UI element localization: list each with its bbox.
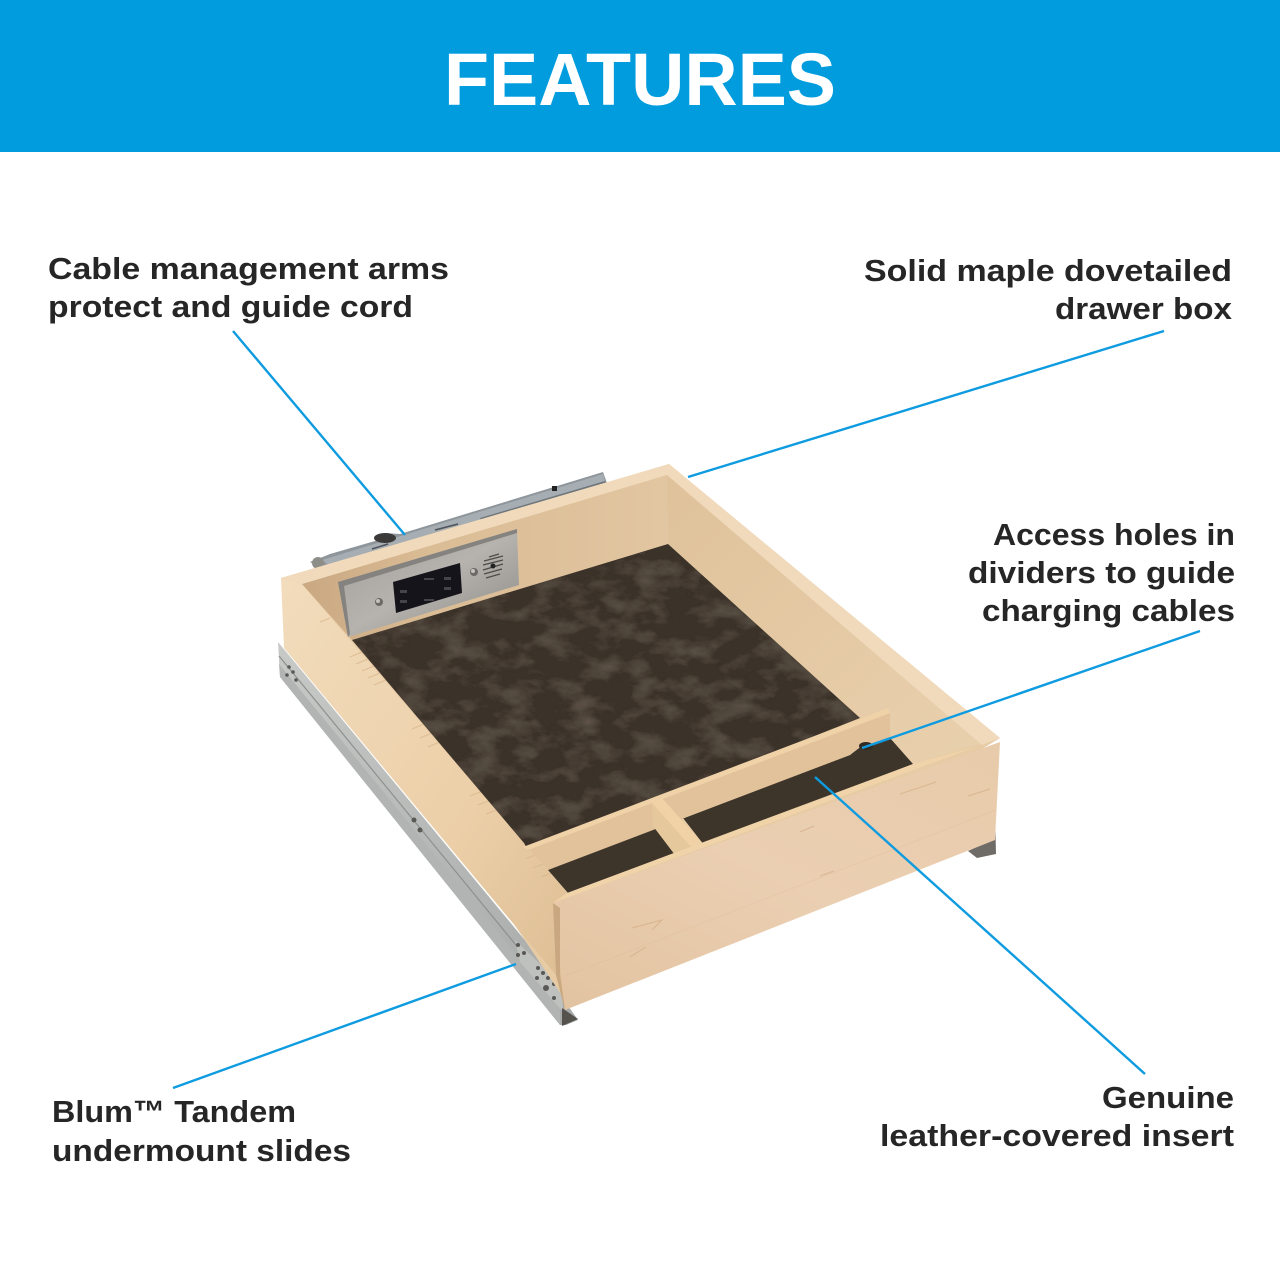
back and right rim xyxy=(281,464,1000,745)
drawer left outer side xyxy=(281,578,567,1010)
label: leather insert: leather-covered insert xyxy=(880,1118,1234,1153)
callout line: access holes xyxy=(862,631,1200,748)
right leather compartment xyxy=(683,738,913,845)
callout line: slides xyxy=(173,964,516,1088)
back wall xyxy=(302,475,668,640)
label: access holes: charging cables xyxy=(982,593,1235,628)
outlet xyxy=(393,563,462,613)
left leather compartment xyxy=(548,823,674,893)
callout line: cable management xyxy=(233,331,405,535)
figured maple ridges on left rim xyxy=(320,618,554,877)
wood grain on front xyxy=(565,782,996,976)
label: cable management arms: protect and guide cord xyxy=(48,289,413,324)
power outlet panel xyxy=(338,529,519,637)
drawer illustration xyxy=(278,464,1000,1026)
leather insert xyxy=(352,544,860,850)
label: solid maple drawer box: drawer box xyxy=(1055,291,1233,326)
drawer front face xyxy=(553,742,1000,1010)
dovetail joint xyxy=(553,903,565,1010)
label: leather insert xyxy=(880,1080,1234,1153)
short divider xyxy=(652,798,704,855)
right wall interior xyxy=(667,475,985,764)
drawer interior base xyxy=(281,464,1000,1000)
cable management arm xyxy=(310,472,607,575)
label: solid maple drawer box: Solid maple dovetailed xyxy=(864,253,1232,288)
screws xyxy=(375,598,383,606)
label: blum slides: Blum™ Tandem xyxy=(52,1094,296,1129)
undermount slide rail xyxy=(278,642,578,1026)
label: access holes: dividers to guide xyxy=(968,555,1235,590)
label: solid maple drawer box xyxy=(864,253,1233,326)
front rim xyxy=(553,738,1000,903)
label: access holes: Access holes in xyxy=(993,517,1235,552)
long divider with access hole xyxy=(523,708,890,870)
label: leather insert: Genuine xyxy=(1102,1080,1234,1115)
vent grille xyxy=(483,554,503,578)
callout line: drawer box xyxy=(688,331,1164,477)
callout line: leather insert xyxy=(815,777,1145,1074)
header banner xyxy=(0,0,1280,152)
title: FEATURES xyxy=(444,38,836,121)
label: blum slides: undermount slides xyxy=(52,1133,351,1168)
right slide foot xyxy=(968,812,996,858)
label: access holes xyxy=(968,517,1235,628)
label: blum slides xyxy=(52,1094,351,1168)
label: cable management arms: Cable management arms xyxy=(48,251,449,286)
label: cable management arms xyxy=(48,251,449,324)
